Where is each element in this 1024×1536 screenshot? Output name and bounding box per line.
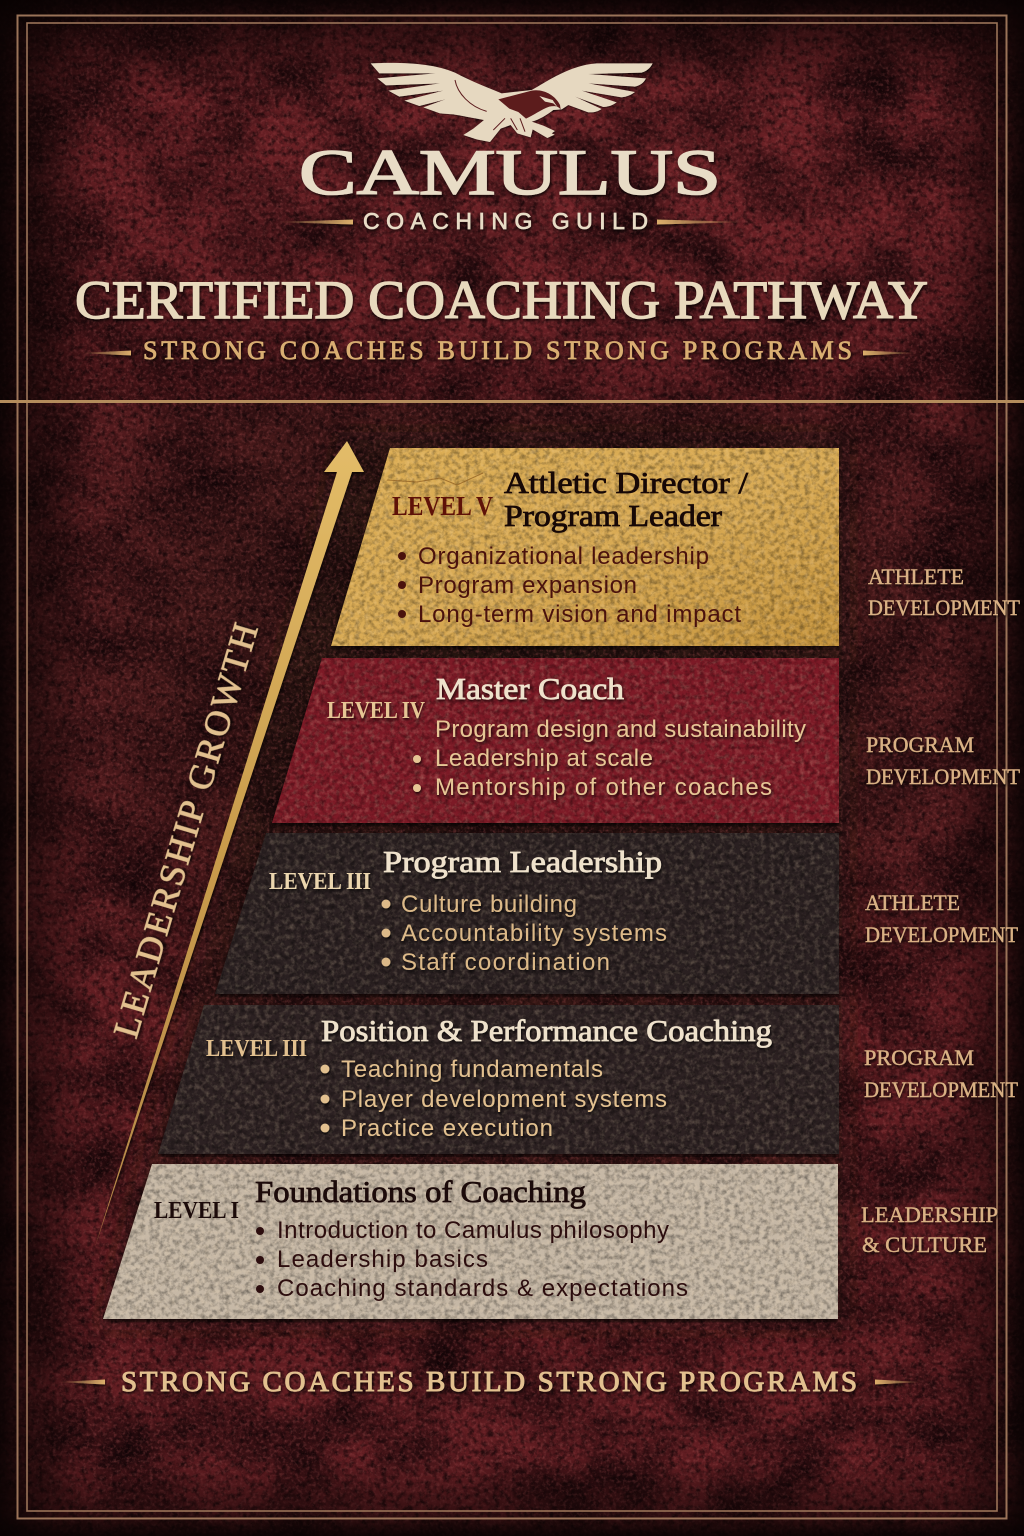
arrow label: LEADERSHIP GROWTH: [105, 619, 266, 1042]
level III label: LEVEL III: [269, 869, 371, 895]
level I bullets: Leadership basics: [277, 1246, 488, 1273]
side label: program development, level IV: [866, 732, 1021, 789]
level III bullets: Culture building: [401, 891, 577, 918]
panel: level IV: [272, 658, 839, 823]
brand name: CAMULUS: [299, 137, 721, 209]
side label: program development, second level III: DEVELOPMENT: [864, 1077, 1019, 1102]
level III bullets: Accountability systems: [401, 920, 667, 947]
side label: leadership and culture: LEADERSHIP: [861, 1202, 998, 1227]
level V slab: [331, 448, 839, 646]
brand sub-line: COACHING GUILD: [363, 208, 648, 234]
level I slab: [103, 1164, 838, 1319]
footer tagline: STRONG COACHES BUILD STRONG PROGRAMS: [121, 1366, 857, 1398]
level IV bullets: Mentorship of other coaches: [435, 774, 772, 801]
second level III bullets: Player development systems: [341, 1086, 667, 1113]
title: CERTIFIED COACHING PATHWAY: [75, 270, 928, 330]
level IV title: Master Coach: [436, 671, 625, 706]
side label: program development, level IV: DEVELOPMENT: [866, 764, 1021, 789]
second level III title: Position & Performance Coaching: [321, 1013, 772, 1048]
level V bullets: Organizational leadership: [418, 543, 709, 570]
side label: program development, second level III: PROGRAM: [864, 1045, 974, 1070]
level V crack: [387, 473, 483, 485]
level V label: LEVEL V: [392, 491, 493, 521]
side labels: [861, 564, 1021, 1257]
second level III label: LEVEL III: [206, 1036, 307, 1062]
level V bullets: [398, 543, 741, 628]
level IV bullets: Program design and sustainability: [435, 716, 806, 743]
panel: level V: [331, 448, 839, 646]
level I label: LEVEL I: [154, 1198, 239, 1224]
arrow: leadership growth: [95, 441, 364, 1247]
level V title: Attletic Director /: [504, 465, 748, 500]
level IV label: LEVEL IV: [327, 698, 426, 724]
side label: athlete development, level III: ATHLETE: [865, 890, 960, 915]
panel: level I: [103, 1164, 838, 1319]
level IV slab: [272, 658, 839, 823]
panel: level III position and performance: [158, 1005, 839, 1154]
panel: level III program leadership: [215, 833, 839, 994]
brand sub-line: [275, 208, 747, 234]
level V bullets: Program expansion: [418, 572, 637, 599]
level V title: Program Leader: [504, 498, 723, 533]
level I bullets: [256, 1217, 688, 1302]
level III bullets: [382, 891, 667, 976]
side label: program development, level IV: PROGRAM: [866, 732, 974, 757]
side label: program development, second level III: [864, 1045, 1019, 1102]
level I bullets: Introduction to Camulus philosophy: [277, 1217, 669, 1244]
tagline: STRONG COACHES BUILD STRONG PROGRAMS: [143, 336, 852, 365]
level IV bullets: [413, 716, 806, 801]
level III bullets: Staff coordination: [401, 949, 610, 976]
level III title: Program Leadership: [383, 844, 662, 879]
side label: athlete development, level III: [865, 890, 1019, 947]
side label: athlete development, level III: DEVELOPMENT: [865, 922, 1019, 947]
icon: eagle logo: [371, 63, 653, 142]
header divider: [0, 400, 1024, 403]
second level III bullets: [320, 1056, 667, 1142]
level V title: [504, 465, 748, 533]
second level III bullets: Teaching fundamentals: [341, 1056, 603, 1083]
side label: leadership and culture: [861, 1202, 998, 1257]
side label: leadership and culture: & CULTURE: [862, 1232, 987, 1257]
side label: athlete development, level V: [868, 564, 1021, 620]
level III slab: [215, 833, 839, 994]
second level III slab: [158, 1005, 839, 1154]
level I title: Foundations of Coaching: [255, 1174, 586, 1209]
level IV bullets: Leadership at scale: [435, 745, 653, 772]
level I bullets: Coaching standards & expectations: [277, 1275, 688, 1302]
side label: athlete development, level V: ATHLETE: [868, 564, 964, 589]
second level III bullets: Practice execution: [341, 1115, 553, 1142]
level V bullets: Long-term vision and impact: [418, 601, 741, 628]
